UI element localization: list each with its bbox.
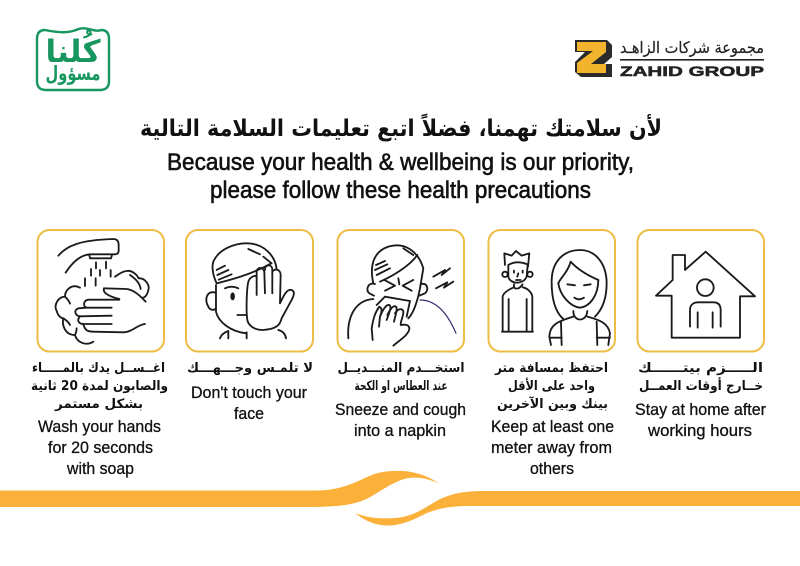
panel: keep distance (488, 230, 615, 478)
caption: sneeze into napkin (335, 361, 466, 440)
icon: person covering face with hand (206, 243, 294, 338)
logo: campaign badge: كُلنا (46, 29, 101, 70)
panel: wash hands (31, 230, 168, 478)
icon: person sneezing into napkin (348, 245, 456, 346)
caption: don't touch face: Don't touch your (191, 384, 307, 402)
caption: wash hands: with soap (66, 460, 134, 478)
caption: stay home: working hours (647, 422, 752, 440)
Arabic company name: مجموعة شركات الزاهـد (620, 38, 764, 58)
caption: wash hands: اغــســل يدك بالمـــــاء (32, 361, 165, 376)
caption: keep distance: بينك وبين الآخرين (497, 396, 608, 412)
logo: campaign badge: مسؤول (46, 61, 100, 85)
caption: wash hands: بشكل مستمر (54, 397, 143, 412)
caption: sneeze into napkin: Sneeze and cough (335, 401, 466, 419)
caption: keep distance: احتفظ بمسافة متر (494, 361, 608, 376)
title: English (167, 149, 634, 204)
icon: hands under faucet (56, 239, 149, 344)
caption: stay home: خــارج أوقات العمــل (639, 377, 763, 394)
panel: don't touch face (186, 230, 313, 423)
caption: keep distance (491, 361, 614, 478)
caption: sneeze into napkin: into a napkin (354, 422, 446, 440)
decorative orange wave band (0, 471, 800, 526)
caption: stay home: الـــــزم بيتــــــك (638, 361, 763, 376)
title: English: Because your health & wellbeing is our priority, (167, 149, 634, 176)
caption: stay home: Stay at home after (635, 401, 766, 419)
title: English: please follow these health precautions (210, 177, 591, 204)
caption: wash hands: والصابون لمدة 20 ثانية (31, 379, 168, 394)
caption: sneeze into napkin: استخـــدم المنـــديــل (338, 361, 464, 376)
caption: wash hands: Wash your hands (38, 418, 161, 436)
logo: Zahid Group (575, 38, 764, 79)
title: Arabic: لأن سلامتك تهمنا، فضلاً اتبع تعليمات السلامة التالية (140, 113, 662, 142)
logo: campaign badge (37, 28, 109, 90)
panel: sneeze into napkin (335, 230, 466, 440)
caption: keep distance: others (530, 460, 574, 478)
English company name: ZAHID GROUP (620, 63, 764, 79)
caption: sneeze into napkin: عند العطاس او الكحة (354, 379, 448, 394)
icon: Z emblem (575, 40, 612, 77)
caption: don't touch face: لا تلمـس وجـــهـــك (187, 361, 313, 376)
icon: man and woman standing apart (502, 250, 610, 345)
caption: keep distance: واحد على الأقل (508, 377, 595, 394)
caption: don't touch face: face (234, 405, 264, 423)
panel: stay home (635, 230, 766, 440)
caption: wash hands (31, 361, 168, 478)
caption: keep distance: Keep at least one (491, 418, 614, 436)
caption: stay home (635, 361, 766, 440)
icon: person inside house (656, 252, 755, 338)
caption: keep distance: meter away from (491, 439, 612, 457)
caption: don't touch face (187, 361, 313, 423)
caption: wash hands: for 20 seconds (48, 439, 153, 457)
